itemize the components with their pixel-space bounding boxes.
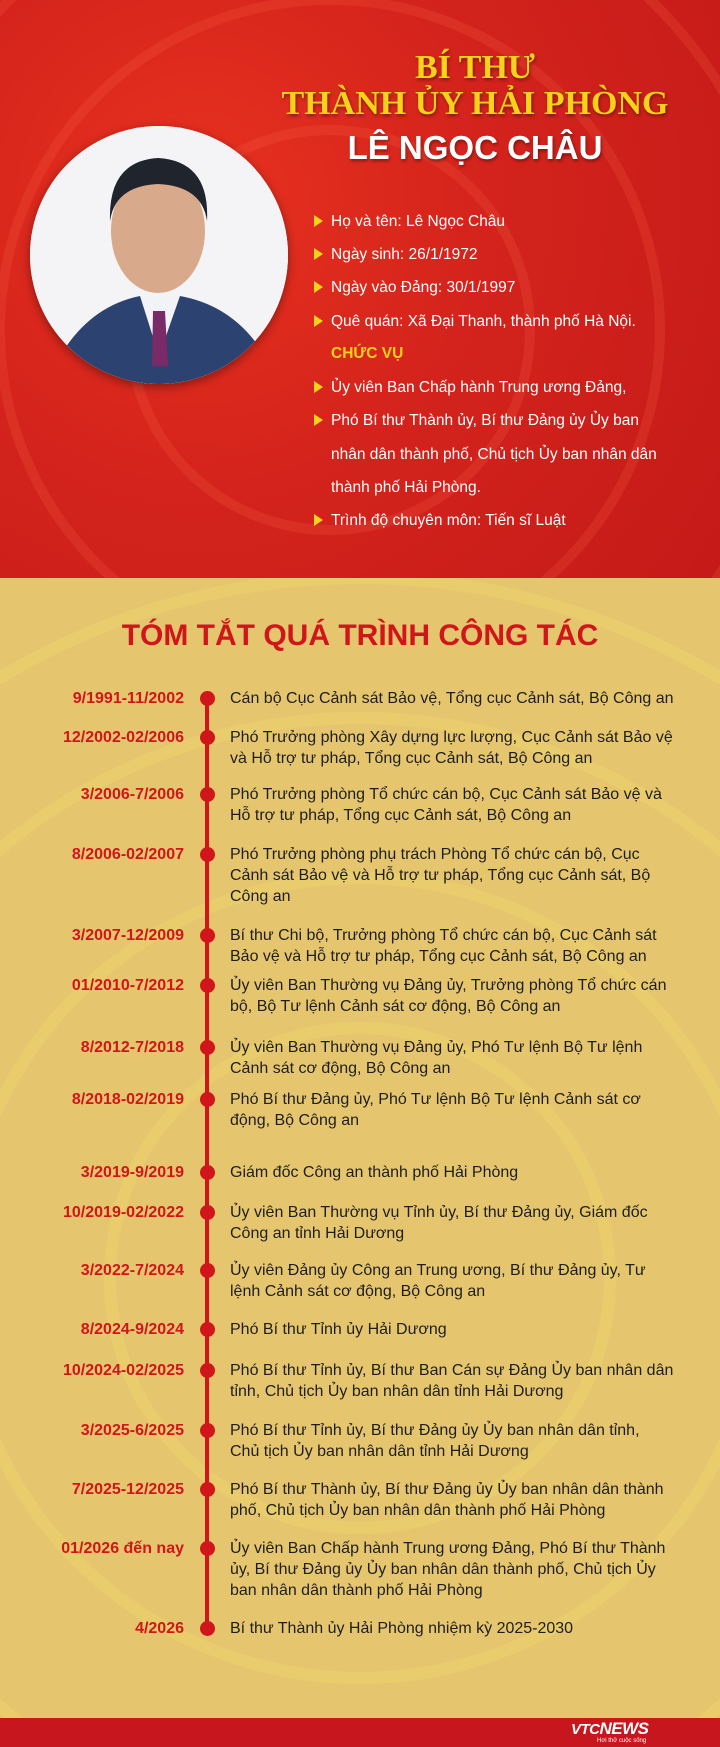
timeline entries: 8/2012-7/2018 — [81, 1039, 184, 1056]
photo: portrait — [30, 126, 288, 384]
info list: Ngày sinh: 26/1/1972 — [331, 246, 478, 263]
timeline entries: 3/2019-9/2019 — [81, 1164, 184, 1181]
timeline entries: 9/1991-11/2002 — [73, 690, 184, 707]
timeline entries: 7/2025-12/2025 — [72, 1481, 184, 1498]
timeline entries: Giám đốc Công an thành phố Hải Phòng — [230, 1164, 518, 1181]
timeline entries: Chủ tịch Ủy ban nhân dân tỉnh Hải Dương — [230, 1443, 529, 1460]
timeline entries: Phó Bí thư Tỉnh ủy Hải Dương — [230, 1321, 447, 1338]
timeline entries — [61, 690, 674, 1637]
info list: thành phố Hải Phòng. — [331, 479, 481, 496]
timeline entries: Cảnh sát cơ động, Bộ Công an — [230, 1060, 450, 1077]
timeline entries: Công an tỉnh Hải Dương — [230, 1225, 404, 1242]
timeline entries: lệnh Cảnh sát cơ động, Bộ Công an — [230, 1283, 485, 1300]
panel: header background — [0, 0, 720, 578]
timeline entries: ban nhân dân thành phố Hải Phòng — [230, 1582, 483, 1599]
info list: Phó Bí thư Thành ủy, Bí thư Đảng ủy Ủy ban — [331, 412, 639, 429]
info list: Quê quán: Xã Đại Thanh, thành phố Hà Nội. — [331, 313, 636, 330]
timeline entries: Phó Trưởng phòng Xây dựng lực lượng, Cục Cảnh sát Bảo vệ — [230, 729, 673, 746]
footer — [0, 1718, 720, 1747]
title — [281, 48, 670, 169]
title: THÀNH ỦY HẢI PHÒNG — [282, 85, 668, 122]
timeline entries: Ủy viên Đảng ủy Công an Trung ương, Bí thư Đảng ủy, Tư — [230, 1262, 646, 1279]
timeline entries: động, Bộ Công an — [230, 1112, 359, 1129]
timeline entries: tỉnh, Chủ tịch Ủy ban nhân dân tỉnh Hải Dương — [230, 1383, 563, 1400]
timeline entries: Cán bộ Cục Cảnh sát Bảo vệ, Tổng cục Cảnh sát, Bộ Công an — [230, 690, 674, 707]
timeline entries: 8/2018-02/2019 — [72, 1091, 184, 1108]
timeline entries: Bí thư Chi bộ, Trưởng phòng Tổ chức cán bộ, Cục Cảnh sát — [230, 927, 657, 944]
info list — [314, 213, 657, 529]
timeline entries: Ủy viên Ban Thường vụ Tỉnh ủy, Bí thư Đảng ủy, Giám đốc — [230, 1204, 648, 1221]
timeline line — [205, 700, 209, 1630]
timeline entries: 10/2024-02/2025 — [63, 1362, 184, 1379]
timeline entries: Cảnh sát Bảo vệ và Hỗ trợ tư pháp, Tổng cục Cảnh sát, Bộ — [230, 867, 650, 884]
timeline entries: 3/2006-7/2006 — [81, 786, 184, 803]
info list: Họ và tên: Lê Ngọc Châu — [331, 213, 505, 230]
timeline entries: 8/2006-02/2007 — [72, 846, 184, 863]
timeline entries: Phó Bí thư Tỉnh ủy, Bí thư Đảng ủy Ủy ban nhân dân tỉnh, — [230, 1422, 640, 1439]
timeline entries: Công an — [230, 888, 290, 905]
timeline entries: 10/2019-02/2022 — [63, 1204, 184, 1221]
timeline entries: phố, Chủ tịch Ủy ban nhân dân thành phố Hải Phòng — [230, 1502, 605, 1519]
timeline entries: 3/2025-6/2025 — [81, 1422, 184, 1439]
timeline entries: 01/2026 đến nay — [61, 1540, 184, 1557]
info list: Ngày vào Đảng: 30/1/1997 — [331, 279, 515, 296]
timeline entries: Phó Bí thư Đảng ủy, Phó Tư lệnh Bộ Tư lệnh Cảnh sát cơ — [230, 1091, 641, 1108]
info list: Ủy viên Ban Chấp hành Trung ương Đảng, — [331, 379, 626, 396]
timeline entries: Bí thư Thành ủy Hải Phòng nhiệm kỳ 2025-2030 — [230, 1620, 573, 1637]
timeline entries: 4/2026 — [135, 1620, 184, 1637]
timeline entries: Phó Bí thư Tỉnh ủy, Bí thư Ban Cán sự Đảng Ủy ban nhân dân — [230, 1362, 673, 1379]
logo: VTC NEWS: Hơi thở cuộc sống — [597, 1738, 646, 1744]
title: LÊ NGỌC CHÂU — [348, 129, 602, 166]
timeline entries: 12/2002-02/2006 — [63, 729, 184, 746]
timeline entries: Bảo vệ và Hỗ trợ tư pháp, Tổng cục Cảnh sát, Bộ Công an — [230, 948, 647, 965]
timeline entries: và Hỗ trợ tư pháp, Tổng cục Cảnh sát, Bộ Công an — [230, 750, 592, 767]
timeline entries: Ủy viên Ban Chấp hành Trung ương Đảng, Phó Bí thư Thành — [230, 1540, 665, 1557]
timeline entries: 8/2024-9/2024 — [81, 1321, 184, 1338]
timeline entries: ủy, Bí thư Đảng ủy Ủy ban nhân dân thành phố, Chủ tịch Ủy — [230, 1561, 656, 1578]
timeline entries: 01/2010-7/2012 — [72, 977, 184, 994]
timeline entries: Phó Trưởng phòng Tổ chức cán bộ, Cục Cảnh sát Bảo vệ và — [230, 786, 662, 803]
info list: nhân dân thành phố, Chủ tịch Ủy ban nhân dân — [331, 446, 657, 463]
info list: CHỨC VỤ — [331, 345, 403, 362]
timeline entries: Hỗ trợ tư pháp, Tổng cục Cảnh sát, Bộ Công an — [230, 807, 571, 824]
timeline entries: bộ, Bộ Tư lệnh Cảnh sát cơ động, Bộ Công an — [230, 998, 560, 1015]
heading: timeline: TÓM TẮT QUÁ TRÌNH CÔNG TÁC — [122, 619, 598, 652]
logo: VTC NEWS: VTCNEWS — [571, 1719, 648, 1738]
timeline entries: 3/2007-12/2009 — [72, 927, 184, 944]
info list: Trình độ chuyên môn: Tiến sĩ Luật — [331, 512, 566, 529]
timeline entries: Phó Trưởng phòng phụ trách Phòng Tổ chức cán bộ, Cục — [230, 846, 640, 863]
timeline entries: Phó Bí thư Thành ủy, Bí thư Đảng ủy Ủy ban nhân dân thành — [230, 1481, 664, 1498]
timeline entries: 3/2022-7/2024 — [81, 1262, 184, 1279]
timeline entries: Ủy viên Ban Thường vụ Đảng ủy, Phó Tư lệnh Bộ Tư lệnh — [230, 1039, 642, 1056]
panel: timeline background — [0, 578, 720, 1718]
timeline entries: Ủy viên Ban Thường vụ Đảng ủy, Trưởng phòng Tổ chức cán — [230, 977, 666, 994]
title: BÍ THƯ — [415, 49, 535, 86]
